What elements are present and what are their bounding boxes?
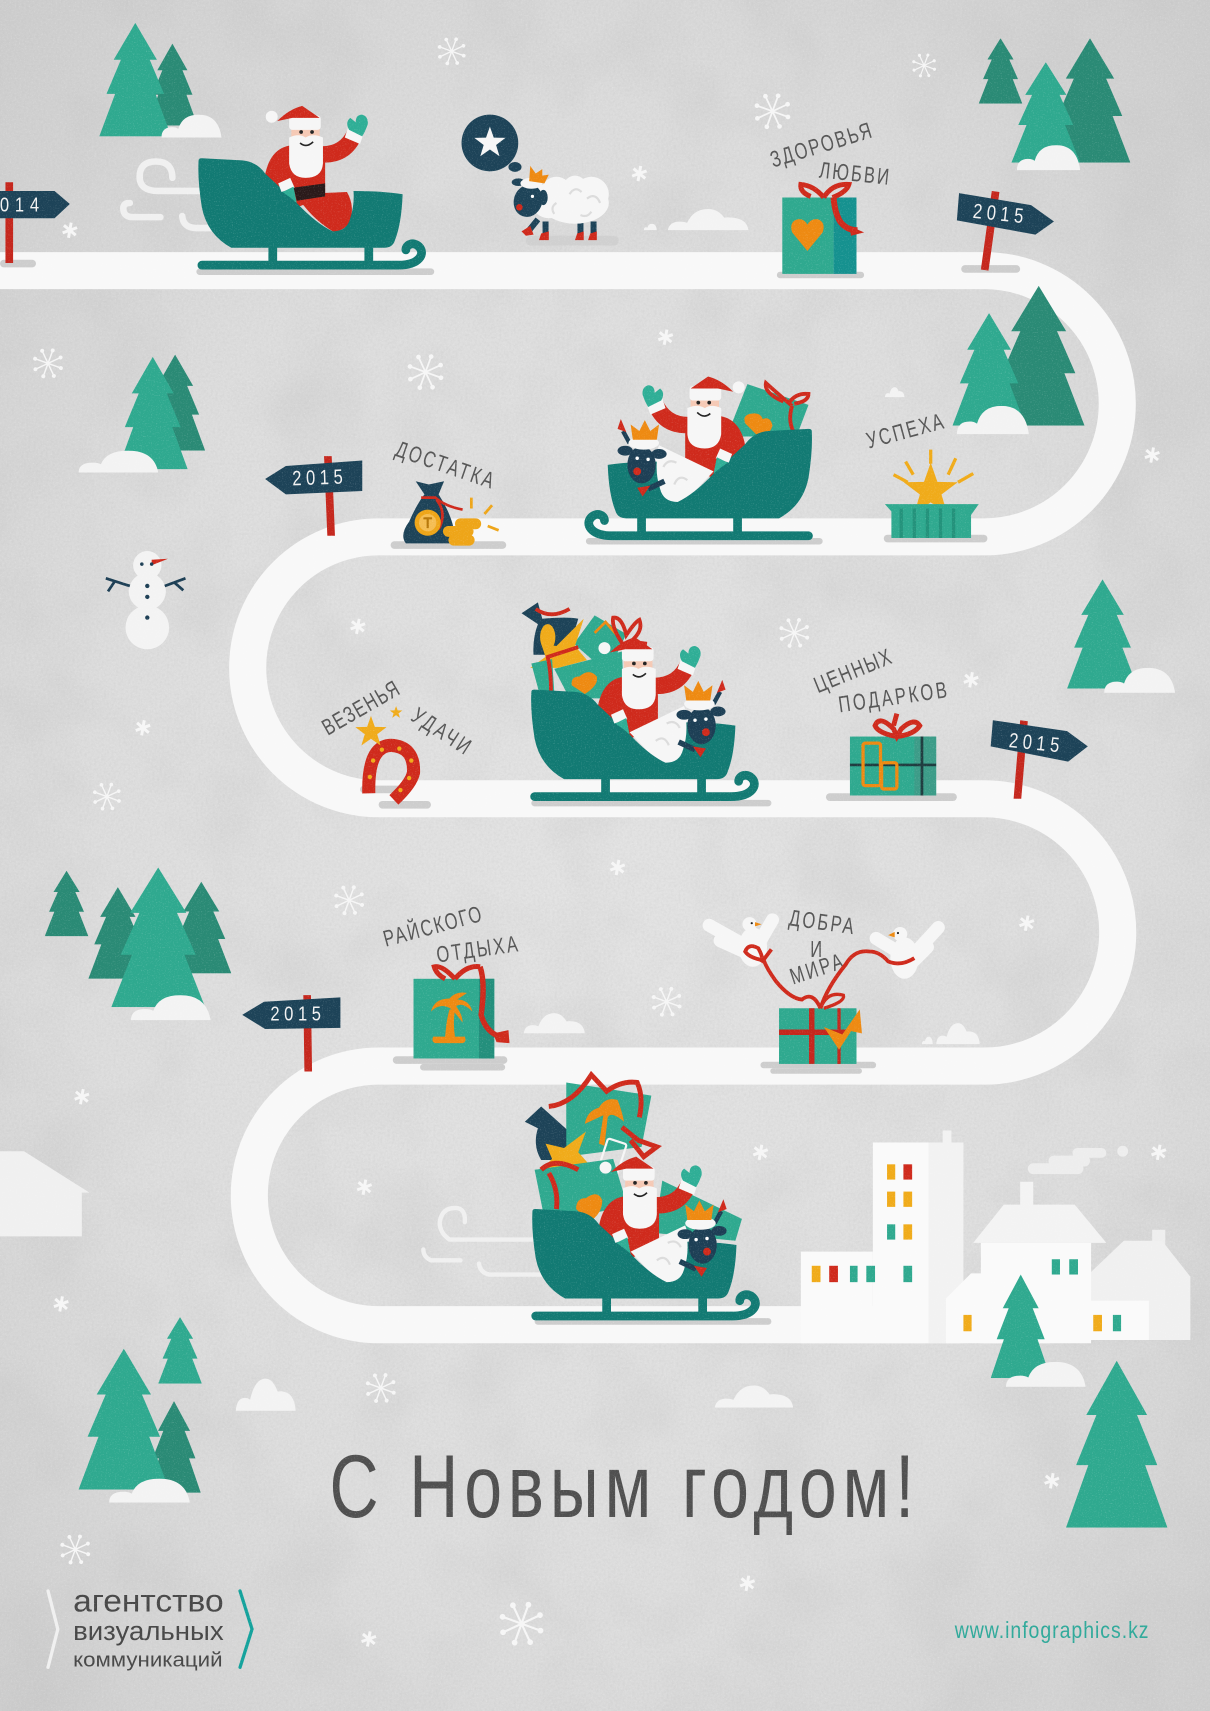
label: любви: ЛЮБВИ [818, 158, 890, 190]
town tree with snow [991, 1275, 1086, 1387]
sled scene 4: Santa with full sled [423, 1075, 771, 1325]
label: отдыха: ОТДЫХА [435, 932, 520, 968]
town: chimney smoke [1028, 1146, 1128, 1174]
signpost 2015, third row [991, 720, 1088, 799]
signpost 2015, first row: 2015 [972, 199, 1025, 227]
small snow clouds [236, 209, 980, 1411]
signpost 2015, fourth row [242, 995, 340, 1072]
signpost 2014 [0, 182, 70, 267]
agency logo: агентство [73, 1583, 224, 1619]
sled scene 1: Santa in sled [123, 106, 434, 275]
right lone tree [1067, 579, 1175, 693]
agency logo: коммуникаций [73, 1648, 223, 1671]
sled scene 2: Santa with gift and sheep [586, 376, 823, 545]
signpost 2015, fourth row: 2015 [270, 1001, 321, 1025]
gift with heart [777, 184, 864, 278]
tree: bottom right [1066, 1361, 1167, 1528]
tree group: top left [99, 23, 221, 137]
town: tower and low building [801, 1130, 963, 1343]
winding white road [0, 271, 1118, 1325]
greeting heading: С Новым годом! [330, 1436, 914, 1536]
signpost 2015, first row [957, 191, 1054, 273]
dove left [709, 917, 772, 967]
snowman [106, 551, 185, 649]
sled scene 3: Santa with sack, gifts and sheep [522, 602, 771, 806]
horseshoe with stars [355, 706, 431, 809]
label: мира: МИРА [787, 949, 847, 990]
label: ценных: ЦЕННЫХ [811, 645, 895, 699]
signpost 2015, second row [265, 456, 362, 536]
label: подарков: ПОДАРКОВ [837, 678, 949, 718]
tree group: bottom left [79, 1317, 202, 1503]
money bag with coins [391, 481, 506, 549]
label: и: И [810, 937, 822, 963]
signpost 2015, third row: 2015 [1008, 728, 1061, 757]
tree group: right of second row [953, 286, 1085, 434]
label: здоровья: ЗДОРОВЬЯ [767, 118, 875, 173]
tree group: left of second row [79, 355, 205, 472]
label: успеха: УСПЕХА [864, 409, 947, 454]
sheep with crown [509, 166, 619, 246]
website url: www.infographics.kz [954, 1617, 1149, 1643]
town: houses [946, 1182, 1190, 1343]
gift with gadgets [826, 714, 957, 801]
tree group: top right [979, 38, 1130, 170]
agency logo: визуальных [73, 1616, 224, 1646]
label: добра: ДОБРА [787, 906, 856, 940]
thought bubble with star [462, 115, 522, 172]
agency logo [48, 1583, 252, 1671]
label: райского: РАЙСКОГО [380, 900, 484, 952]
tree group: lower left [45, 868, 231, 1020]
open box with star [884, 450, 987, 542]
label: удачи: УДАЧИ [407, 703, 475, 760]
dove right [876, 927, 938, 979]
left edge house [0, 1151, 89, 1236]
gift with palm tree [393, 967, 510, 1070]
gift with ribbons held by doves [745, 946, 914, 1074]
label: везенья: ВЕЗЕНЬЯ [318, 677, 404, 741]
signpost 2015, second row: 2015 [292, 465, 343, 490]
label: достатка: ДОСТАТКА [392, 437, 497, 494]
